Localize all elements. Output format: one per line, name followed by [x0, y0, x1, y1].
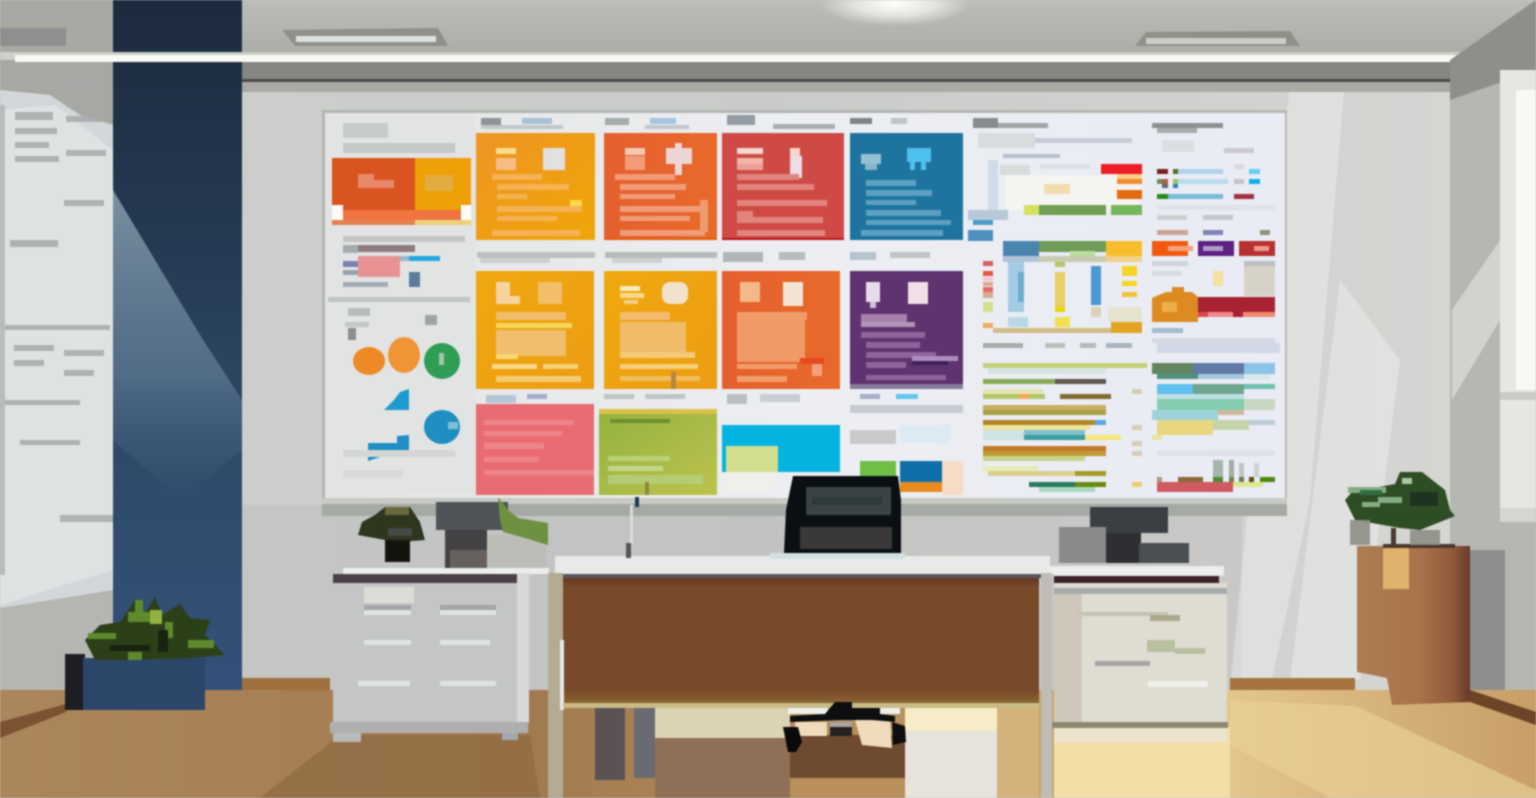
panel: left column	[328, 116, 475, 494]
icon: blue arrow	[368, 435, 409, 461]
desk monitor right	[1059, 507, 1189, 563]
office chair	[784, 476, 901, 553]
icon: green circle	[424, 343, 460, 379]
card row 2: purple	[850, 271, 963, 389]
wall light beams	[1230, 80, 1400, 690]
card row 3: cyan panel	[722, 425, 840, 492]
desk items left	[436, 497, 548, 568]
card row 1: orange	[476, 133, 595, 240]
desk rear legs	[595, 702, 655, 780]
card row 2: amber	[476, 271, 594, 389]
card row 2: amber 2	[604, 271, 717, 389]
banner	[332, 158, 471, 225]
icon: orange circle large	[388, 337, 420, 373]
plant: right planter	[1345, 472, 1470, 705]
panel: right charts column one	[968, 118, 1147, 492]
card row 1: orange-red	[604, 133, 717, 240]
plant: left desk	[358, 507, 425, 562]
left window with charts	[0, 60, 113, 608]
card row 1: red	[722, 133, 844, 240]
horizontal bar chart	[983, 363, 1147, 492]
card row 1: blue	[850, 133, 963, 240]
floor	[0, 678, 1536, 798]
card row 3: blocks	[860, 461, 963, 495]
icon: cyan arrow	[384, 389, 409, 410]
card row 3: green	[599, 409, 717, 495]
icon: blue circle	[424, 410, 460, 444]
coloured buttons	[1152, 241, 1275, 256]
card row 3: pink	[476, 404, 594, 495]
stacked bars	[1005, 164, 1142, 215]
left cabinet	[330, 568, 549, 742]
column headings	[477, 115, 963, 444]
mini bar chart	[343, 236, 465, 287]
right wall and window	[1450, 0, 1536, 710]
plant: left floor	[65, 597, 225, 710]
small column chart	[1157, 460, 1275, 492]
panel: right charts column two	[1152, 123, 1280, 492]
desk lamp stand	[626, 497, 639, 558]
stacked area chart	[1152, 363, 1275, 440]
ceiling light strip	[15, 52, 1460, 62]
card row 2: orange	[722, 271, 840, 389]
board bottom shadow	[322, 498, 1287, 516]
legend rows	[1157, 164, 1260, 199]
icon: orange circle	[353, 347, 385, 375]
blue pillar	[113, 0, 242, 700]
chair base	[783, 702, 906, 752]
ceiling	[0, 0, 1536, 92]
data table	[983, 241, 1142, 333]
wall infographic board	[322, 110, 1287, 508]
desk	[548, 553, 1224, 798]
right cabinet	[1050, 573, 1228, 742]
orange and red chart	[1152, 287, 1275, 322]
